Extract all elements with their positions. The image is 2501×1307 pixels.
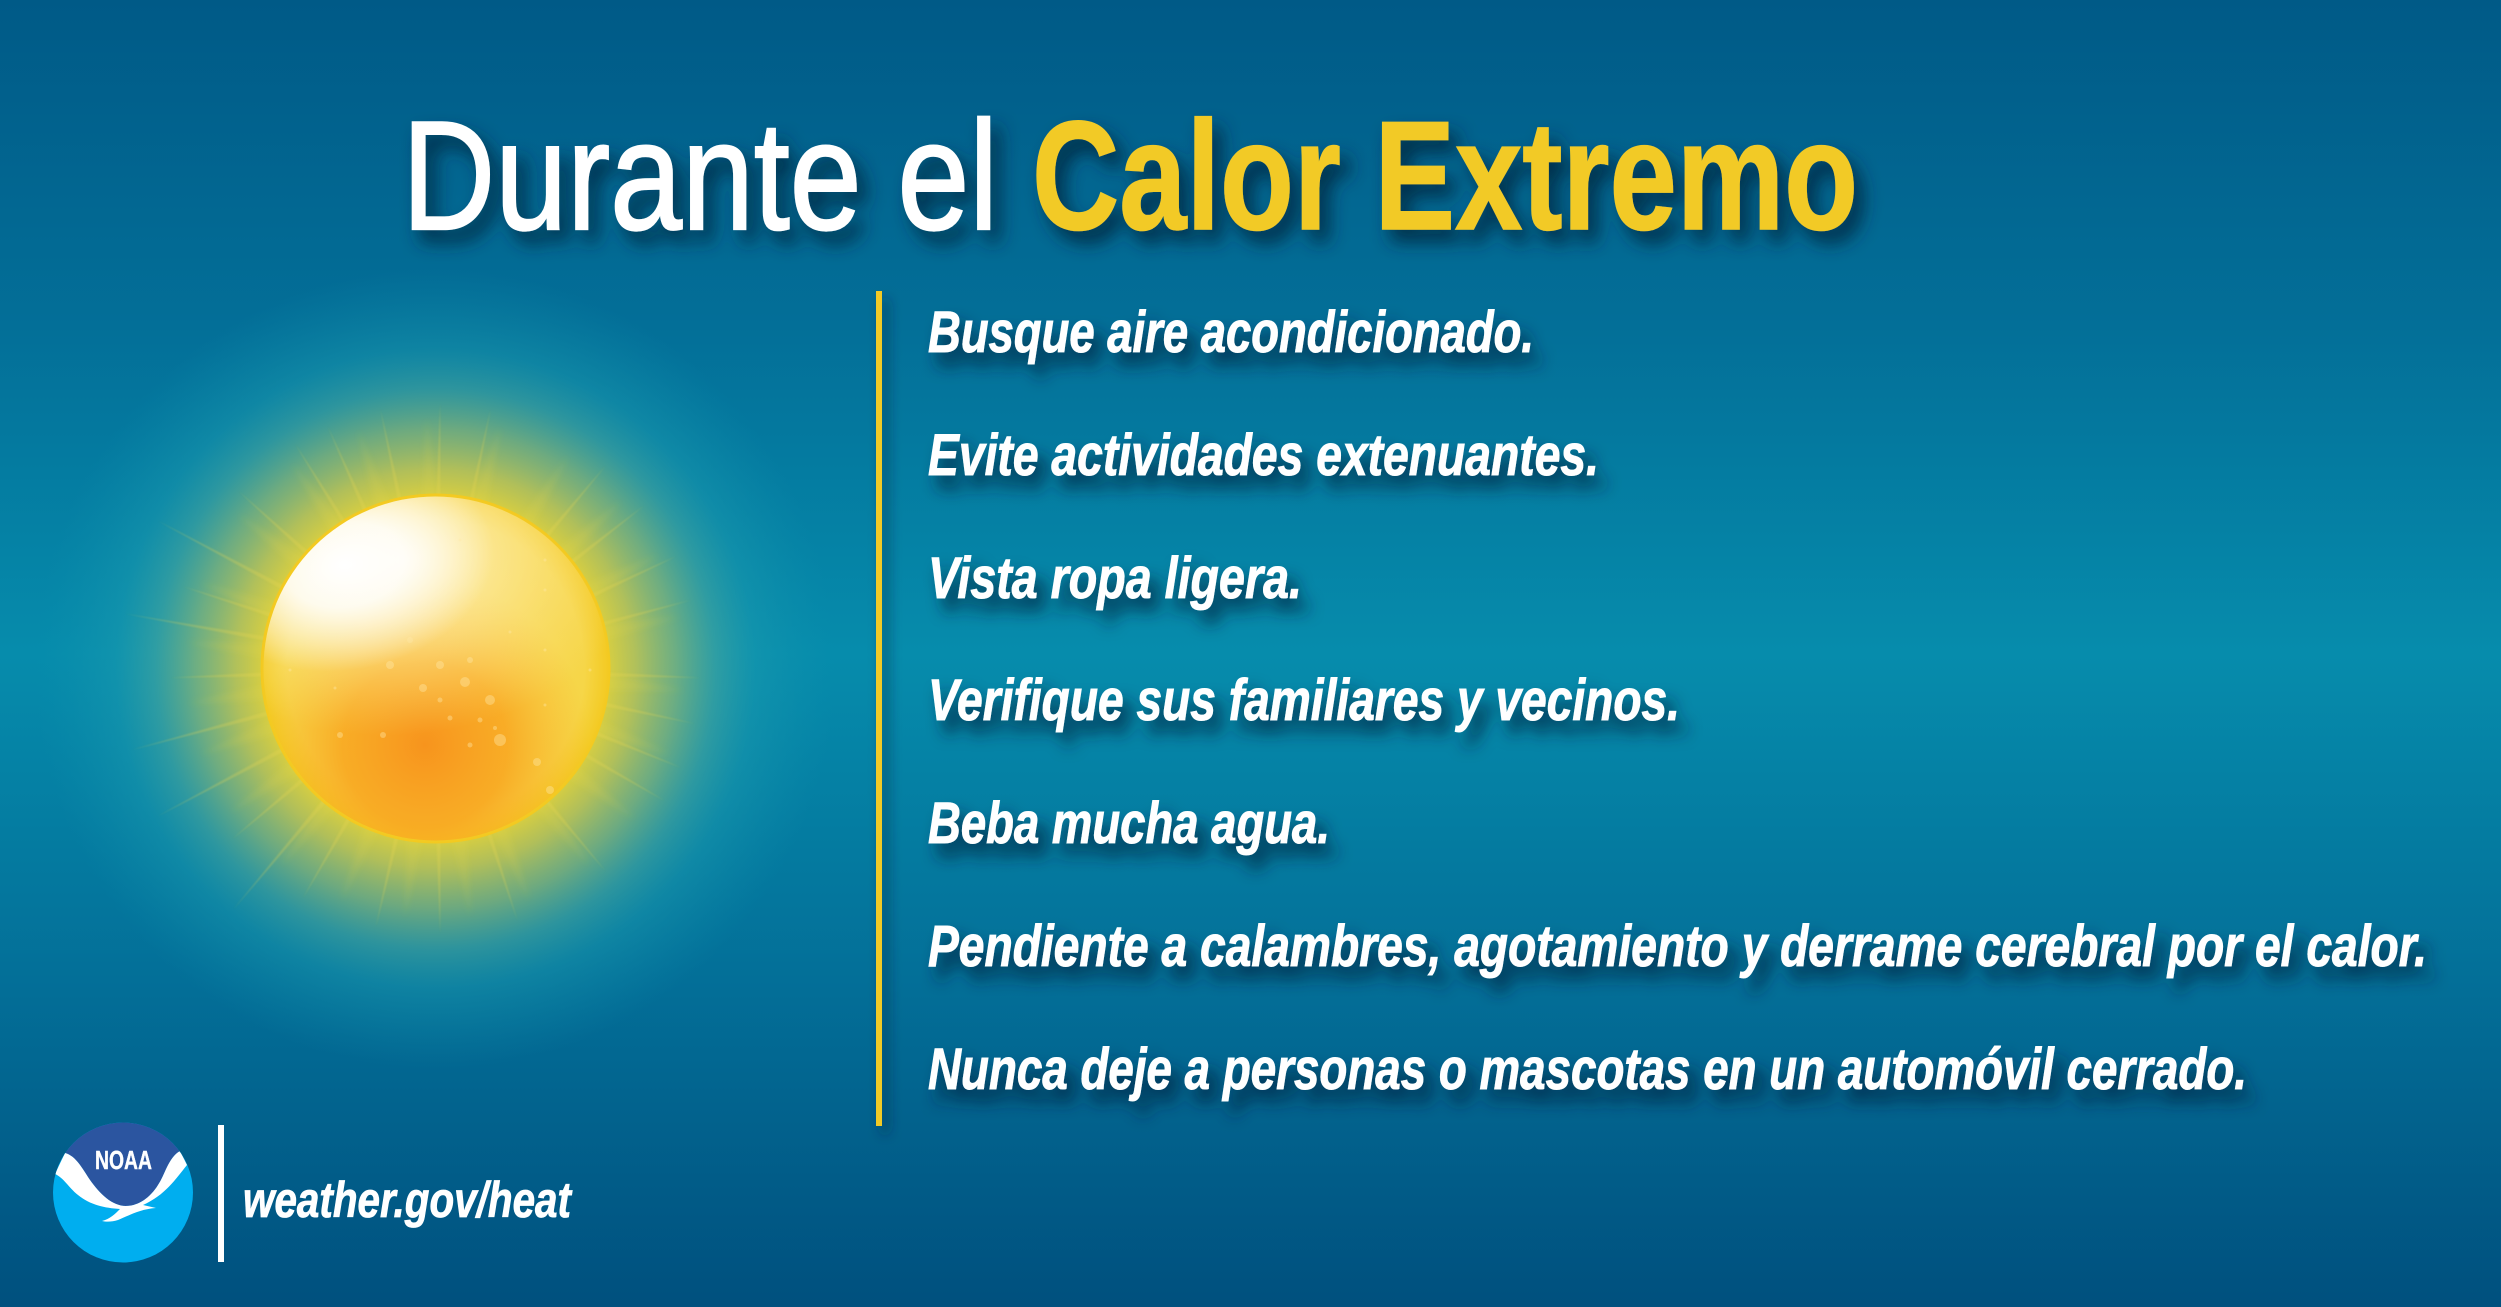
tip 2: Evite actividades extenuantes. — [928, 423, 1599, 488]
sun glow halo — [36, 268, 836, 1068]
divider bar — [876, 291, 882, 1126]
logo divider — [218, 1125, 224, 1262]
tip 3: Vista ropa ligera. — [928, 546, 1302, 611]
logo wordmark: NOAA — [95, 1145, 152, 1175]
website url: weather.gov/heat — [243, 1172, 573, 1228]
sun pale upper glaze — [264, 496, 602, 722]
tip 1: Busque aire acondicionado. — [928, 300, 1534, 365]
sun sparkles — [288, 538, 592, 794]
tip 4: Verifique sus familiares y vecinos. — [928, 668, 1680, 733]
logo white bird — [55, 1151, 187, 1222]
tip 5: Beba mucha agua. — [928, 791, 1330, 856]
title — [402, 89, 1858, 262]
sun fine rays — [125, 404, 700, 933]
logo dark blue top — [66, 1122, 180, 1206]
sun white highlight — [264, 496, 486, 668]
icon: NOAA logo — [53, 1122, 193, 1262]
list of safety tips — [928, 300, 2427, 1102]
sun orange core — [264, 496, 608, 840]
logo light blue disc — [53, 1122, 193, 1262]
sun disc — [260, 494, 610, 844]
title: Durante el — [402, 89, 998, 262]
icon: sun — [104, 305, 767, 1034]
title: Calor Extremo — [1032, 89, 1858, 262]
sun soft wide rays — [186, 418, 685, 917]
